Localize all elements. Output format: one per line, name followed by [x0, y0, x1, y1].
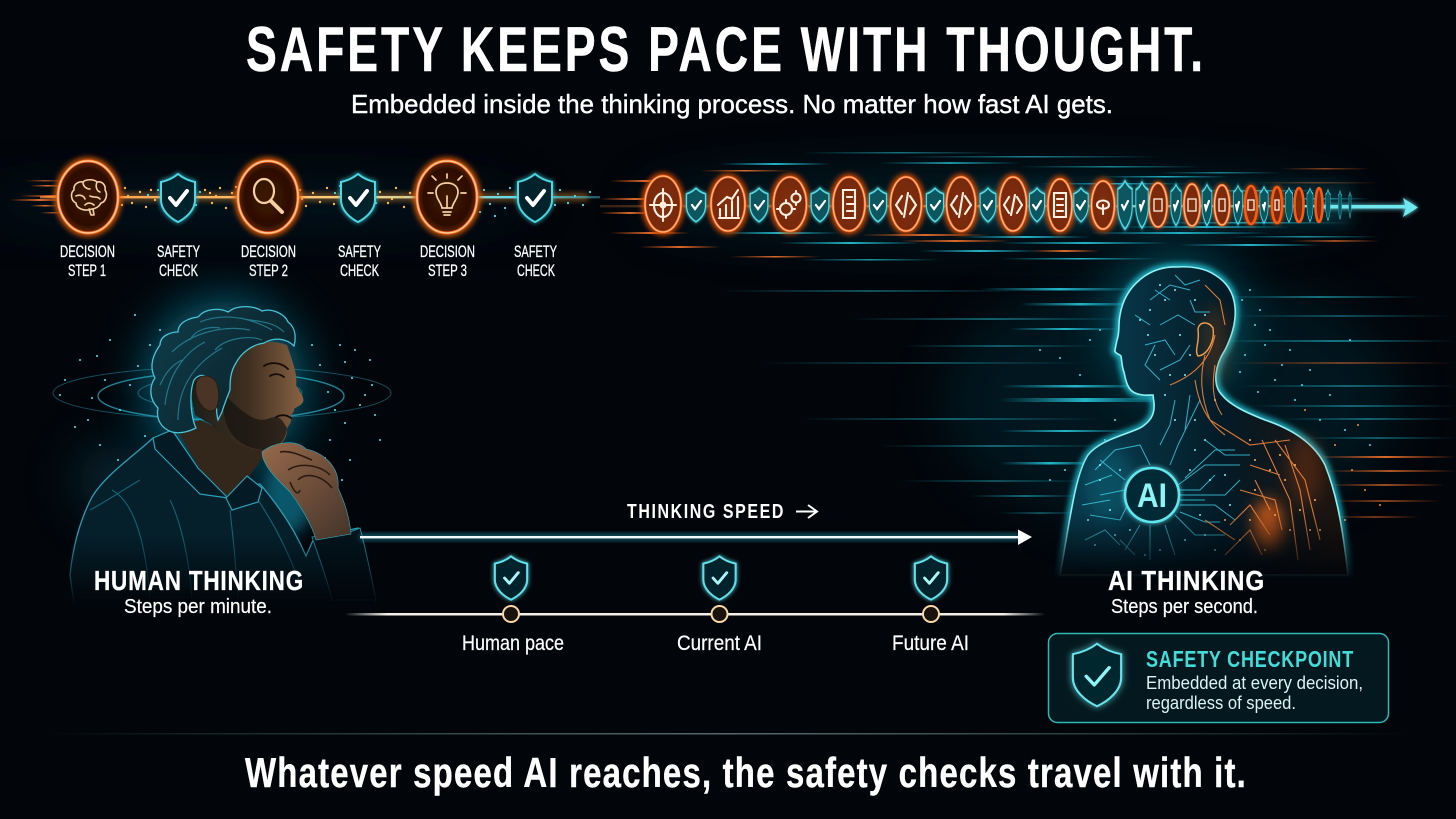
timeline: [345, 613, 1045, 616]
step labels: CHECK: [159, 262, 198, 280]
hair strands: [160, 317, 284, 420]
background glows: [0, 170, 1400, 530]
figure: AI body: [720, 255, 1456, 575]
fast row safety shields: [686, 181, 1351, 229]
beard: [224, 395, 287, 450]
milestone: current AI: Current AI: [677, 632, 762, 655]
speed streaks: [600, 152, 1380, 260]
milestone: human pace: Human pace: [462, 632, 564, 655]
icon: light bulb: [428, 174, 466, 215]
step labels: DECISION: [241, 243, 296, 261]
arrow: speed axis: [360, 530, 1032, 545]
legend text: regardless of speed.: [1146, 692, 1296, 713]
fast row decision ovals: [645, 176, 1322, 232]
fingers: [280, 452, 332, 493]
subtitle: Embedded inside the thinking process. No matter how fast AI gets.: [351, 89, 1113, 119]
decision step 2 node: [238, 161, 298, 233]
cyan circuit traces: [1082, 275, 1250, 560]
data streaks around AI: [720, 288, 1456, 520]
milestone: future AI: [892, 556, 969, 655]
safety shield 1: [161, 174, 195, 222]
bottom divider: [40, 733, 1416, 734]
milestone: current AI: [677, 556, 762, 655]
speed line: [600, 205, 1410, 207]
torso and sleeve: [70, 438, 376, 604]
step labels: [60, 243, 557, 280]
step labels: DECISION: [420, 243, 475, 261]
ear: [196, 376, 219, 411]
panel: safety checkpoint legend: [1048, 634, 1388, 722]
arrow: speed direction: [1320, 198, 1418, 217]
AI silhouette: [1060, 267, 1348, 575]
thinking speed label: THINKING SPEED: [627, 501, 785, 523]
shirt folds: [90, 480, 302, 600]
glow behind head: [75, 300, 314, 535]
thinking speed scale: [345, 501, 1045, 655]
label: human thinking: Steps per minute.: [124, 596, 272, 618]
icon: brain: [72, 180, 106, 215]
slow decision row: [10, 161, 600, 280]
legend text: [1146, 672, 1363, 713]
ear outline: [1197, 323, 1213, 356]
label: AI thinking: AI THINKING: [1108, 565, 1265, 596]
label: AI thinking: [1108, 565, 1265, 618]
label: human thinking: [94, 565, 304, 618]
decision step 1 node: [58, 161, 118, 233]
legend text: Embedded at every decision,: [1146, 672, 1363, 693]
icon: magnifier: [254, 179, 282, 212]
orange inner glow: [1254, 499, 1282, 551]
hand on chin: [262, 443, 351, 540]
step labels: DECISION: [60, 243, 115, 261]
orange circuit traces: [1170, 285, 1320, 560]
head and face: [188, 342, 303, 450]
safety shield 3: [518, 174, 552, 222]
glow behind AI: [1109, 255, 1241, 395]
label: AI thinking: Steps per second.: [1111, 596, 1258, 618]
safety shield 2: [341, 174, 375, 222]
AI chest badge: AI: [1137, 477, 1167, 515]
AI chest badge: [1125, 468, 1179, 522]
milestone: human pace: [462, 556, 564, 655]
figure: human thinker: [53, 300, 391, 604]
icon: safety shield: [1073, 644, 1121, 706]
step labels: CHECK: [340, 262, 379, 280]
decision step 3 node: [417, 161, 477, 233]
step labels: SAFETY: [157, 243, 200, 261]
hair: [151, 307, 295, 433]
step labels: SAFETY: [338, 243, 381, 261]
shirt cuff: [312, 528, 376, 600]
orbit rings and particles: [53, 315, 391, 480]
step labels: STEP 2: [249, 262, 288, 280]
brow and eye: [264, 363, 291, 418]
step labels: CHECK: [517, 262, 555, 280]
label: human thinking: HUMAN THINKING: [94, 565, 304, 596]
milestone: future AI: Future AI: [892, 632, 969, 655]
neck: [176, 420, 268, 500]
circuit nodes: [1088, 285, 1230, 555]
collar: [153, 430, 262, 510]
fast decision row: [600, 152, 1418, 260]
step labels: SAFETY: [514, 243, 557, 261]
step labels: STEP 3: [428, 262, 467, 280]
step labels: STEP 1: [68, 262, 106, 280]
fast row checkmarks: [692, 201, 1265, 209]
legend heading: SAFETY CHECKPOINT: [1146, 646, 1354, 672]
connecting line and sparks: [10, 180, 600, 216]
oval highlight rings: [645, 176, 1230, 232]
fast row icons: [650, 189, 1279, 221]
